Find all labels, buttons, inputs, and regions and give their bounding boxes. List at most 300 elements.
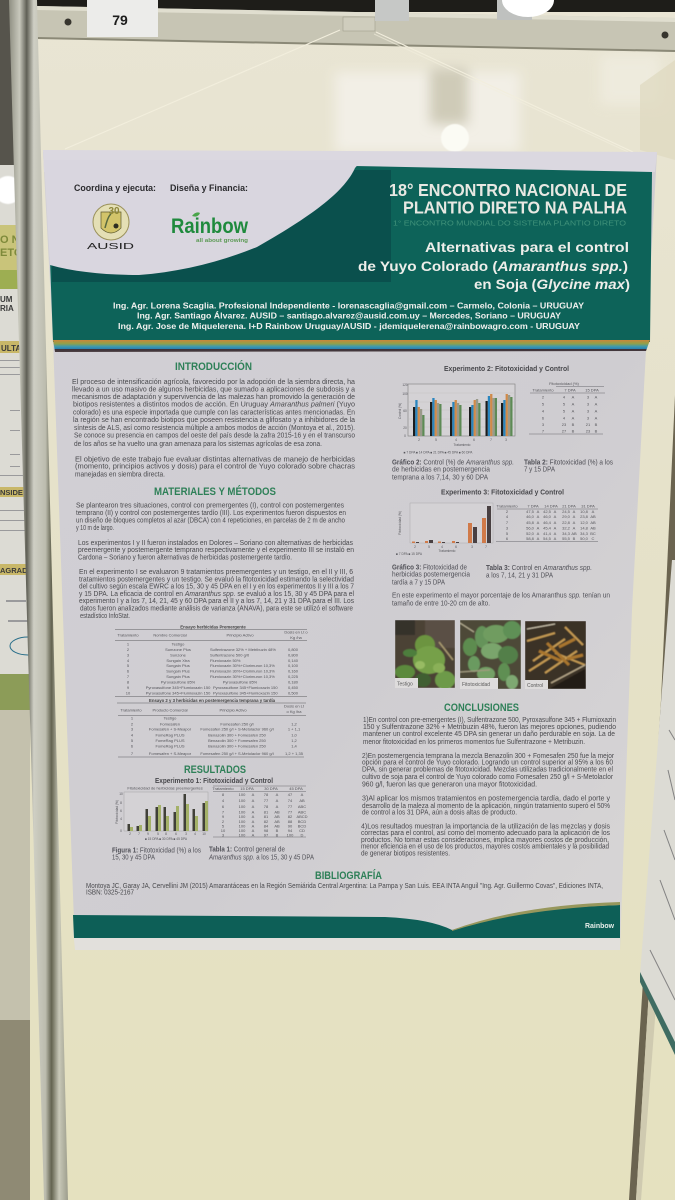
table 3: control: 58,8	[526, 536, 535, 541]
table 3: control: Tratamiento	[496, 504, 518, 508]
text block: conclusiones: de generar biotipos resistentes.	[361, 850, 450, 858]
metal brackets	[343, 0, 554, 31]
neighbouring poster left: UM	[0, 295, 13, 304]
table: ensayo 2 y 3 postemergencia: Fomesafen	[160, 722, 180, 726]
table 2: fitotoxicidad: 21	[586, 422, 591, 427]
photo: testigo	[395, 620, 455, 688]
bar chart: grafico 2 control: 2	[418, 438, 420, 442]
poster header banner	[44, 160, 652, 352]
table 2: fitotoxicidad: 7	[542, 428, 545, 434]
table: ensayo 2 y 3 postemergencia: 7	[131, 751, 134, 756]
figure and table captions experiment 1: Amaranthus spp. a los 15, 30 y 45 DPA	[208, 854, 314, 862]
table 3: control: 12,0	[580, 520, 589, 525]
text block: conclusiones: DPA, sin generar problemas de fitotoxicidad. Mezclas utilizadas tradicionalmente en el	[362, 766, 613, 774]
captions experiment 2: de herbicidas en postemergencia	[392, 466, 490, 474]
bar chart: grafico 2 control: 120	[402, 383, 408, 387]
table: ensayo herbicidas premergente: 4	[127, 658, 130, 663]
table: ensayo herbicidas premergente: Kg /ha	[290, 635, 303, 640]
captions experiment 3: a los 7, 14, 21 y 31 DPA	[486, 572, 553, 580]
table 1: control general: 90	[288, 824, 293, 828]
authors: Ing. Agr. Santiago Álvarez. AUSID – santiago.alvarez@ausid.com.uy – Mercedes, Soriano – URUGUAY	[137, 310, 561, 320]
table: ensayo herbicidas premergente: Sulfentrazone 32% + Metribuzin 48%	[210, 647, 276, 652]
table 1: control general: A	[252, 832, 255, 838]
table 1: control general: 78	[264, 792, 269, 797]
table: ensayo 2 y 3 postemergencia: 1,2	[291, 738, 298, 743]
table 2: fitotoxicidad: 3	[542, 422, 545, 427]
text block: conclusiones: cultivo de soja para el control de Yuyo colorado como Fomesafen 250 g/l + S-Metolaclor	[362, 774, 614, 781]
table 2: fitotoxicidad: 5	[563, 408, 566, 414]
table 1: control general: Tratamiento	[212, 786, 234, 791]
table 3: control: A	[554, 531, 557, 536]
bar chart: grafico 2 control	[398, 383, 515, 454]
bar chart: figura 1 fitotoxicidad: 9	[147, 832, 149, 836]
table: ensayo 2 y 3 postemergencia: FomeRag PLUS	[155, 738, 185, 743]
text block: metodos: experimento I y a los 7, 14, 21, 45 y 60 DPA para el II y a los 7, 14, 21 y 31 DPA para el III. Los	[79, 598, 354, 605]
photo label: control: Control	[527, 683, 543, 689]
table: ensayo herbicidas premergente: 0,500	[288, 690, 299, 696]
table 2: fitotoxicidad: 4	[563, 416, 566, 420]
heading: experimento 1: Experimento 1: Fitotoxicidad y Control	[155, 776, 273, 785]
table: ensayo herbicidas premergente: 1	[127, 642, 130, 646]
text block: metodos: y 10 m de largo.	[76, 525, 114, 532]
table: ensayo 2 y 3 postemergencia: Tratamiento	[120, 708, 142, 712]
bar chart: grafico 2 control: 0	[404, 434, 406, 438]
table 1: control general: 100	[239, 792, 246, 797]
table 3: control: A	[554, 509, 557, 514]
event title: 1° ENCONTRO MUNDIAL DO SISTEMA PLANTIO DIRETO	[393, 218, 626, 228]
bar chart: figura 1 fitotoxicidad: 6	[120, 809, 122, 813]
table 2: fitotoxicidad: A	[572, 394, 575, 400]
bar chart: grafico 2 control: 5	[435, 438, 437, 442]
bar chart: grafico 2 control: 4	[455, 438, 457, 442]
bar chart: grafico 2 control: 6	[473, 438, 475, 442]
authors: Ing. Agr. Jose de Miquelerena. I+D Rainbow Uruguay/AUSID - jdemiquelerena@rainbowagro.com - URUGUAY	[118, 321, 580, 331]
table 3: control: A	[537, 531, 540, 536]
table: ensayo herbicidas premergente: Flumioxazin 30%+Clorimuron 10,3%	[210, 668, 275, 674]
table 2: fitotoxicidad: B	[595, 428, 598, 434]
table 1: control general: AB	[274, 814, 280, 819]
table: ensayo 2 y 3 postemergencia: Dosis en Lt	[284, 704, 305, 708]
text block: metodos: preemergente y postemergente temprano respectivamente y el experimento III se instaló en	[78, 547, 354, 554]
table 1: control general: ABC	[298, 804, 306, 809]
bar chart: grafico 3 fitotoxicidad: 4	[441, 545, 443, 549]
table 3: control: A	[554, 526, 557, 530]
table 2: fitotoxicidad: 3	[587, 416, 590, 420]
table 1: control general: CD	[299, 828, 305, 833]
text block: conclusiones: productos. No tomar estas consideraciones, implica mayores costos de producción,	[361, 837, 609, 844]
neighbouring poster left: ETO	[0, 247, 23, 259]
table 1: control general: 15 DPA	[240, 786, 254, 791]
table 3: control	[496, 504, 598, 542]
bar chart: figura 1 fitotoxicidad	[115, 786, 208, 841]
neighbouring poster left: AGRAD	[0, 566, 28, 575]
authors: Ing. Agr. Lorena Scaglia. Profesional Independiente - lorenascaglia@gmail.com – Carmelo, Colonia – URUGUAY	[113, 300, 584, 310]
table 3: control: C	[592, 536, 595, 541]
authors	[113, 300, 584, 331]
table 2: fitotoxicidad: 3	[587, 408, 590, 414]
table 1: control general: B	[276, 828, 279, 833]
table 3: control: B	[573, 536, 576, 541]
table 3: control: A	[554, 514, 557, 519]
table: ensayo herbicidas premergente: 0,800	[288, 652, 299, 658]
table 1: control general: 77	[288, 804, 293, 809]
table 1: control general: 82	[264, 819, 269, 824]
poster title: de Yuyo Colorado ( Amaranthus spp. )	[358, 258, 628, 274]
table 1: control general: 100	[239, 814, 246, 819]
bar chart: figura 1 fitotoxicidad: 0	[120, 829, 122, 833]
table: ensayo 2 y 3 postemergencia: Fomesafen 250 g/l + S-Metolaclor 960 g/l	[200, 751, 274, 756]
heading: introduccion: INTRODUCCIÓN	[175, 360, 252, 373]
table: ensayo 2 y 3 postemergencia: 1,0	[291, 732, 298, 738]
table: ensayo 2 y 3 postemergencia: Testigo	[164, 716, 177, 720]
table 1: control general: A	[252, 792, 255, 797]
hanging strings	[65, 30, 633, 152]
table: ensayo herbicidas premergente: Flumioxazin 30%+Clorimuron 10,3%	[210, 663, 275, 668]
table: ensayo herbicidas premergente: Pyroxasulfone 345+Flumioxazin 150	[213, 685, 278, 690]
table 3: control: 46,4	[543, 520, 552, 525]
table 3: control: 56,0	[526, 526, 535, 530]
table 3: control: 45,4	[543, 526, 552, 530]
table 1: control general: 81	[264, 810, 269, 814]
table 3: control: 46,0	[543, 514, 552, 519]
table 3: control: A	[573, 509, 576, 514]
table 3: control: 14 DPA	[544, 504, 558, 508]
table 1: control general: 100	[239, 804, 246, 809]
table 3: control: A	[537, 536, 540, 541]
table 3: control: A	[573, 520, 576, 525]
table 3: control: 2	[506, 509, 509, 514]
bar chart: grafico 3 fitotoxicidad: 2	[414, 545, 416, 549]
table 1: control general: 10	[221, 828, 226, 833]
table 1: control general: BCD	[298, 824, 306, 828]
table 1: control general: A	[252, 810, 255, 814]
text block: introduccion: Se conoce su presencia en campos del oeste del país desde la zafra 2015-16 y en el transcurso	[74, 433, 355, 440]
table 3: control: 47,5	[526, 509, 535, 514]
table: ensayo herbicidas premergente: Testigo	[172, 642, 185, 646]
table 2: fitotoxicidad: 2	[542, 394, 545, 400]
table: ensayo herbicidas premergente: 0,160	[288, 668, 299, 674]
text block: metodos: y 15 DPA. La eficacia de control en Amaranthus spp. se evaluó a los 15, 30 y 45 DPA para el	[79, 591, 354, 598]
footer band	[73, 902, 620, 938]
table 3: control: 7	[506, 520, 509, 525]
logo: AUSID: AUSID	[87, 242, 134, 251]
table 3: control: 45,8	[526, 520, 535, 525]
photo label: testigo: Testigo	[397, 682, 413, 688]
table 1: control general: 74	[288, 798, 293, 803]
table 3: control: 14,8	[580, 526, 589, 530]
table 1: control general: D	[301, 832, 304, 838]
table: ensayo herbicidas premergente: Sulfentrazone 500 g/lt	[210, 652, 250, 658]
table 3: control: 32,2	[562, 526, 571, 530]
captions experiment 3: tardía a 7 y 15 DPA	[392, 580, 445, 586]
table 2: fitotoxicidad: B	[595, 422, 598, 427]
table 3: control: A	[554, 520, 557, 525]
table: ensayo herbicidas premergente: Sungain Plus	[166, 668, 190, 674]
bar chart: grafico 2 control: ■ 7 DPA ■ 14 DPA ■ 21 DPA ■ 45 DPA ■ 60 DPA	[404, 450, 473, 454]
table 1: control general: A	[276, 798, 279, 803]
table 3: control: 3	[506, 526, 509, 530]
figure and table captions experiment 1: Tabla 1: Control general de	[209, 846, 285, 854]
bar chart: grafico 3 fitotoxicidad	[396, 503, 493, 556]
table 1: control general: 100	[239, 810, 246, 814]
table 1: control general: AB	[274, 824, 280, 828]
table: ensayo herbicidas premergente: 0,450	[288, 685, 299, 690]
table: ensayo herbicidas premergente: 6	[127, 668, 130, 674]
heading: materiales y metodos: MATERIALES Y MÉTODOS	[154, 485, 276, 498]
text block: conclusiones: menor fitotoxicidad en los primeros momentos fue Sulfentrazone + Metribuzin.	[363, 739, 585, 746]
heading: bibliografia: BIBLIOGRAFÍA	[315, 869, 382, 882]
table: ensayo herbicidas premergente: 0,800	[288, 647, 299, 652]
table: ensayo herbicidas premergente: 2	[127, 647, 130, 652]
table: ensayo 2 y 3 postemergencia: Fomesafen + S-Meapor	[149, 726, 192, 732]
table 3: control: A	[573, 526, 576, 530]
table: ensayo herbicidas premergente: 5	[127, 663, 130, 668]
text block: bibliografia	[86, 883, 603, 896]
table 1: control general: 45 DPA	[289, 786, 303, 791]
table 1: control general: 8	[222, 792, 225, 797]
panel: bibliografia	[86, 869, 603, 896]
bar chart: grafico 2 control: 100	[402, 392, 408, 396]
bar chart: figura 1 fitotoxicidad: 2	[129, 832, 131, 836]
text block: metodos: estadístico InfoStat.	[80, 613, 130, 620]
table 2: fitotoxicidad: 3	[587, 394, 590, 400]
table 2: fitotoxicidad: 5	[563, 402, 566, 406]
table: ensayo herbicidas premergente: 0,100	[288, 663, 299, 668]
table 1: control general: 88	[288, 819, 293, 824]
text block: conclusiones: desarrollo de la maleza al momento de la aplicación, ningún tratamiento superó el 50%	[362, 803, 610, 810]
bar chart: grafico 3 fitotoxicidad: 5	[428, 545, 430, 549]
table: ensayo herbicidas premergente: Pyroxasulfone 85%	[223, 680, 258, 684]
table 1: control general: 100	[239, 832, 246, 838]
table 3: control: AB	[590, 526, 596, 530]
table 3: control: BC	[590, 531, 596, 536]
table 3: control: 21 DPA	[562, 504, 576, 508]
table 1: control general: 100	[239, 824, 246, 828]
table 1: control general: 2	[222, 819, 225, 824]
footer logo: Rainbow: Rainbow	[585, 921, 614, 930]
table: ensayo 2 y 3 postemergencia: 1,4	[291, 744, 298, 748]
table 2: fitotoxicidad: A	[595, 402, 598, 406]
table 1: control general: 77	[288, 810, 293, 814]
table 3: control: 34,3	[562, 531, 571, 536]
table 1: control general: A	[252, 804, 255, 809]
text block: introduccion: biotipos resistentes a distintos modos de acción. En Uruguay Amaranthus palmeri (Yuyo	[73, 402, 355, 409]
table 1: control general: 78	[264, 804, 269, 809]
photo label: fitotoxicidad: Fitotoxicidad	[462, 682, 490, 688]
table: ensayo 2 y 3 postemergencia	[117, 698, 306, 757]
table 1: control general: 97	[264, 832, 269, 838]
figure and table captions experiment 1	[112, 846, 314, 862]
heading: experimento 3: Experimento 3: Fitotoxicidad y Control	[441, 488, 564, 496]
table: ensayo 2 y 3 postemergencia: 1,2 + 1,35	[285, 751, 304, 756]
table 2: fitotoxicidad: 23	[586, 428, 591, 434]
text block: conclusiones	[361, 717, 616, 858]
text block: introduccion: colorado) es una especie importada que cumple con las características antes mencionadas. En	[73, 409, 355, 416]
left aluminium frame	[9, 0, 68, 1200]
table 2: fitotoxicidad: Fitotoxicidad (%)	[549, 381, 580, 386]
table 1: control general: 5	[222, 824, 225, 828]
bar chart: figura 1 fitotoxicidad: 10	[202, 832, 206, 836]
photo: fitotoxicidad	[460, 620, 521, 689]
table: ensayo herbicidas premergente: Tratamiento	[117, 632, 139, 638]
table 3: control: 6	[506, 536, 509, 541]
table 2: fitotoxicidad	[529, 381, 605, 434]
text block: introduccion: de los años se ha vuelto una gran amenaza para los sistemas agrícolas de esa zona.	[74, 441, 322, 448]
logo: AUSID: 30	[108, 206, 120, 217]
table: ensayo herbicidas premergente: Sumzone Plus	[165, 647, 191, 652]
table: ensayo 2 y 3 postemergencia: 5	[131, 738, 134, 743]
table: ensayo herbicidas premergente: 3	[127, 652, 130, 658]
table 3: control: 52,0	[526, 531, 535, 536]
table 2: fitotoxicidad: A	[572, 402, 575, 406]
table 1: control general: A	[276, 804, 279, 809]
logo: AUSID	[87, 204, 134, 251]
text block: metodos: un diseño de bloques completos al azar (DBCA) con 4 repeticiones, en parcelas de 2 m de ancho	[76, 518, 345, 524]
photo label: testigo	[395, 678, 418, 688]
table: ensayo herbicidas premergente: 9	[127, 685, 130, 690]
table 1: control general: 47	[288, 792, 293, 797]
table 3: control: 29,0	[562, 514, 571, 519]
table 1: control general: 82	[288, 814, 293, 819]
bar chart: grafico 3 fitotoxicidad: 3	[471, 545, 473, 549]
table: ensayo herbicidas premergente: Pyroxasulfone 345+Flumioxazin 150	[146, 685, 211, 690]
table 1: control general: A	[252, 819, 255, 824]
bar chart: figura 1 fitotoxicidad: Fitotoxicidad de herbicidas preemergentes	[127, 786, 203, 790]
number label 79: 79	[112, 12, 128, 28]
table 3: control: 50,0	[580, 536, 589, 541]
bar chart: figura 1 fitotoxicidad: 4	[194, 832, 196, 836]
table: ensayo 2 y 3 postemergencia: 3	[131, 726, 134, 732]
bar chart: grafico 3 fitotoxicidad: ■ 7 DPA ■ 15 DPA	[396, 552, 423, 556]
text block: tamano amaranthus: En este experimento el mayor porcentaje de los Amaranthus spp. tenían un	[392, 592, 610, 600]
logo: Rainbow	[171, 212, 249, 244]
table 1: control general: 100	[239, 819, 246, 824]
bar chart: grafico 2 control: 7	[490, 438, 492, 442]
table 3: control: AB	[571, 531, 577, 536]
table 2: fitotoxicidad: 27	[562, 428, 567, 434]
table: ensayo herbicidas premergente: 8	[127, 680, 130, 684]
table 2: fitotoxicidad: A	[595, 394, 598, 400]
bar chart: figura 1 fitotoxicidad: 3	[185, 832, 187, 836]
bar chart: grafico 2 control: 60	[403, 409, 407, 413]
table 3: control: 31 DPA	[581, 504, 595, 508]
table 1: control general: BCD	[298, 819, 306, 824]
photo: control	[525, 621, 586, 689]
poster sheet	[43, 150, 657, 950]
wall reflections	[335, 55, 675, 160]
poster title	[358, 239, 630, 292]
bar chart: figura 1 fitotoxicidad: 8	[165, 832, 167, 836]
table 1: control general: 98	[264, 828, 269, 833]
table: ensayo herbicidas premergente: 0,140	[288, 658, 299, 663]
table 3: control: 34,3	[580, 531, 589, 536]
table 2: fitotoxicidad: 7 DPA	[564, 388, 576, 392]
table 3: control: 42,5	[543, 509, 552, 514]
table: ensayo herbicidas premergente: Dosis en Lt o	[284, 630, 308, 634]
table 3: control: 41,4	[543, 531, 552, 536]
panel: materiales y metodos	[76, 485, 354, 620]
text block: introduccion: El objetivo de este trabajo fue evaluar distintas alternativas de manejo de herbicidas	[75, 456, 356, 464]
text block: conclusiones: 3)Al aplicar los mismos tratamientos en postemergencia tardía, dado el porte y	[362, 796, 611, 802]
table 2: fitotoxicidad: 23	[562, 422, 567, 427]
number label 79	[87, 0, 158, 37]
text block: introduccion: manejadas en siembra directa.	[75, 471, 165, 478]
table 1: control general: ABC	[298, 810, 306, 814]
table 3: control: 24,5	[562, 509, 571, 514]
bar chart: grafico 2 control: Control (%)	[398, 403, 402, 419]
poster title: Alternativas para el control	[425, 239, 629, 255]
table: ensayo 2 y 3 postemergencia: 1 + 1,1	[288, 726, 301, 732]
bar chart: grafico 3 fitotoxicidad: 6	[455, 545, 457, 549]
table 3: control: AB	[590, 520, 596, 525]
table 1: control general: 100	[239, 798, 246, 803]
logos panel: coordina y ejecuta / disena y financia	[74, 183, 249, 251]
text block: conclusiones: 4)Los resultados muestran la importancia de la utilización de las mezclas y dosis	[361, 824, 610, 830]
table: ensayo 2 y 3 postemergencia: 4	[131, 732, 134, 738]
bar chart: figura 1 fitotoxicidad: 5	[157, 832, 159, 836]
figure and table captions experiment 1: 15, 30 y 45 DPA	[112, 854, 155, 862]
captions experiment 2: 7 y 15 DPA	[524, 466, 555, 474]
table 3: control: 23,8	[580, 514, 589, 519]
event title: 18° ENCONTRO NACIONAL DE	[389, 180, 627, 200]
captions experiment 2	[392, 460, 613, 482]
table: ensayo herbicidas premergente: 0,180	[288, 680, 299, 684]
table 1: control general: AB	[274, 810, 280, 814]
table 2: fitotoxicidad: 5	[542, 402, 545, 406]
table: ensayo 2 y 3 postemergencia: Benazolin 300 + Fomesafen 250	[208, 732, 267, 738]
table 3: control: 4	[506, 514, 509, 519]
table: ensayo 2 y 3 postemergencia: 1,2	[291, 722, 298, 726]
table 1: control general: 100	[287, 832, 294, 838]
table 2: fitotoxicidad: 3	[587, 402, 590, 406]
neighbouring poster right	[640, 560, 675, 1055]
text block: conclusiones: 2)En postemergencia temprana la mezcla Benazolin 300 + Fomesafen 250 fue la mejor	[362, 753, 615, 760]
table: ensayo herbicidas premergente: Pyroxasulfone 345+Flumioxazin 150	[146, 690, 211, 696]
table: ensayo 2 y 3 postemergencia: 6	[131, 744, 134, 748]
text block: conclusiones: opción para el control de Yuyo colorado. Logrando un control superior al 95% a los 60	[362, 760, 613, 766]
table: ensayo herbicidas premergente	[115, 624, 308, 696]
table 2: fitotoxicidad: B	[572, 422, 575, 427]
table: ensayo herbicidas premergente: Sungain Plus	[166, 674, 190, 679]
table 3: control: 10,8	[580, 509, 589, 514]
bar chart: grafico 2 control: Tratamiento	[454, 443, 471, 447]
table 2: fitotoxicidad: 15 DPA	[585, 388, 599, 392]
table 1: control general: 84	[264, 824, 269, 828]
table: ensayo herbicidas premergente: Sungain Xtra	[166, 658, 190, 663]
top rail	[0, 0, 675, 52]
table 1: control general: AB	[299, 798, 305, 803]
bar chart: grafico 3 fitotoxicidad: Fitotoxicidad (%)	[398, 511, 402, 535]
text block: introduccion: (momento, principios activos y dosis) para el control de Yuyo colorado sobre chacras	[75, 464, 356, 471]
text block: conclusiones: de control a los 31 DPA, aún a dosis altas de producto.	[362, 810, 517, 816]
table 1: control general: 100	[239, 828, 246, 833]
table 2: fitotoxicidad: B	[572, 428, 575, 434]
table 1: control general: A	[252, 828, 255, 833]
table: ensayo herbicidas premergente: 10	[126, 690, 131, 696]
table 1: control general: 77	[264, 798, 269, 803]
bar chart: figura 1 fitotoxicidad: Fitotoxicidad (%)	[115, 800, 119, 824]
captions experiment 3: Gráfico 3: Fitotoxicidad de	[392, 564, 467, 572]
table: ensayo herbicidas premergente: Principio Activo	[226, 632, 254, 638]
bar chart: grafico 3 fitotoxicidad: 7	[485, 545, 487, 549]
text block: introduccion: síntesis de ALS, así como resistencia múltiple a ambos modos de acción (Montoya et al., 2015).	[74, 425, 355, 432]
captions experiment 2: temprana a los 7,14, 30 y 60 DPA	[392, 474, 488, 482]
text block: tamano amaranthus	[392, 592, 610, 608]
text block: conclusiones: menor eficiencia en el uso de los productos, mayores costos ambientales y la posibilidad	[361, 844, 609, 850]
text block: metodos: En el experimento I se evaluaron 9 tratamientos preemergentes y un testigo, en el II y III, 6	[79, 569, 353, 576]
text block: conclusiones: correctas para el control, así como del momento adecuado para la aplicación de los	[361, 830, 610, 837]
text block: metodos: temprano (II) y control con postemergentes tardío (III). Los experimentos fueron dispuestos en	[76, 510, 346, 517]
